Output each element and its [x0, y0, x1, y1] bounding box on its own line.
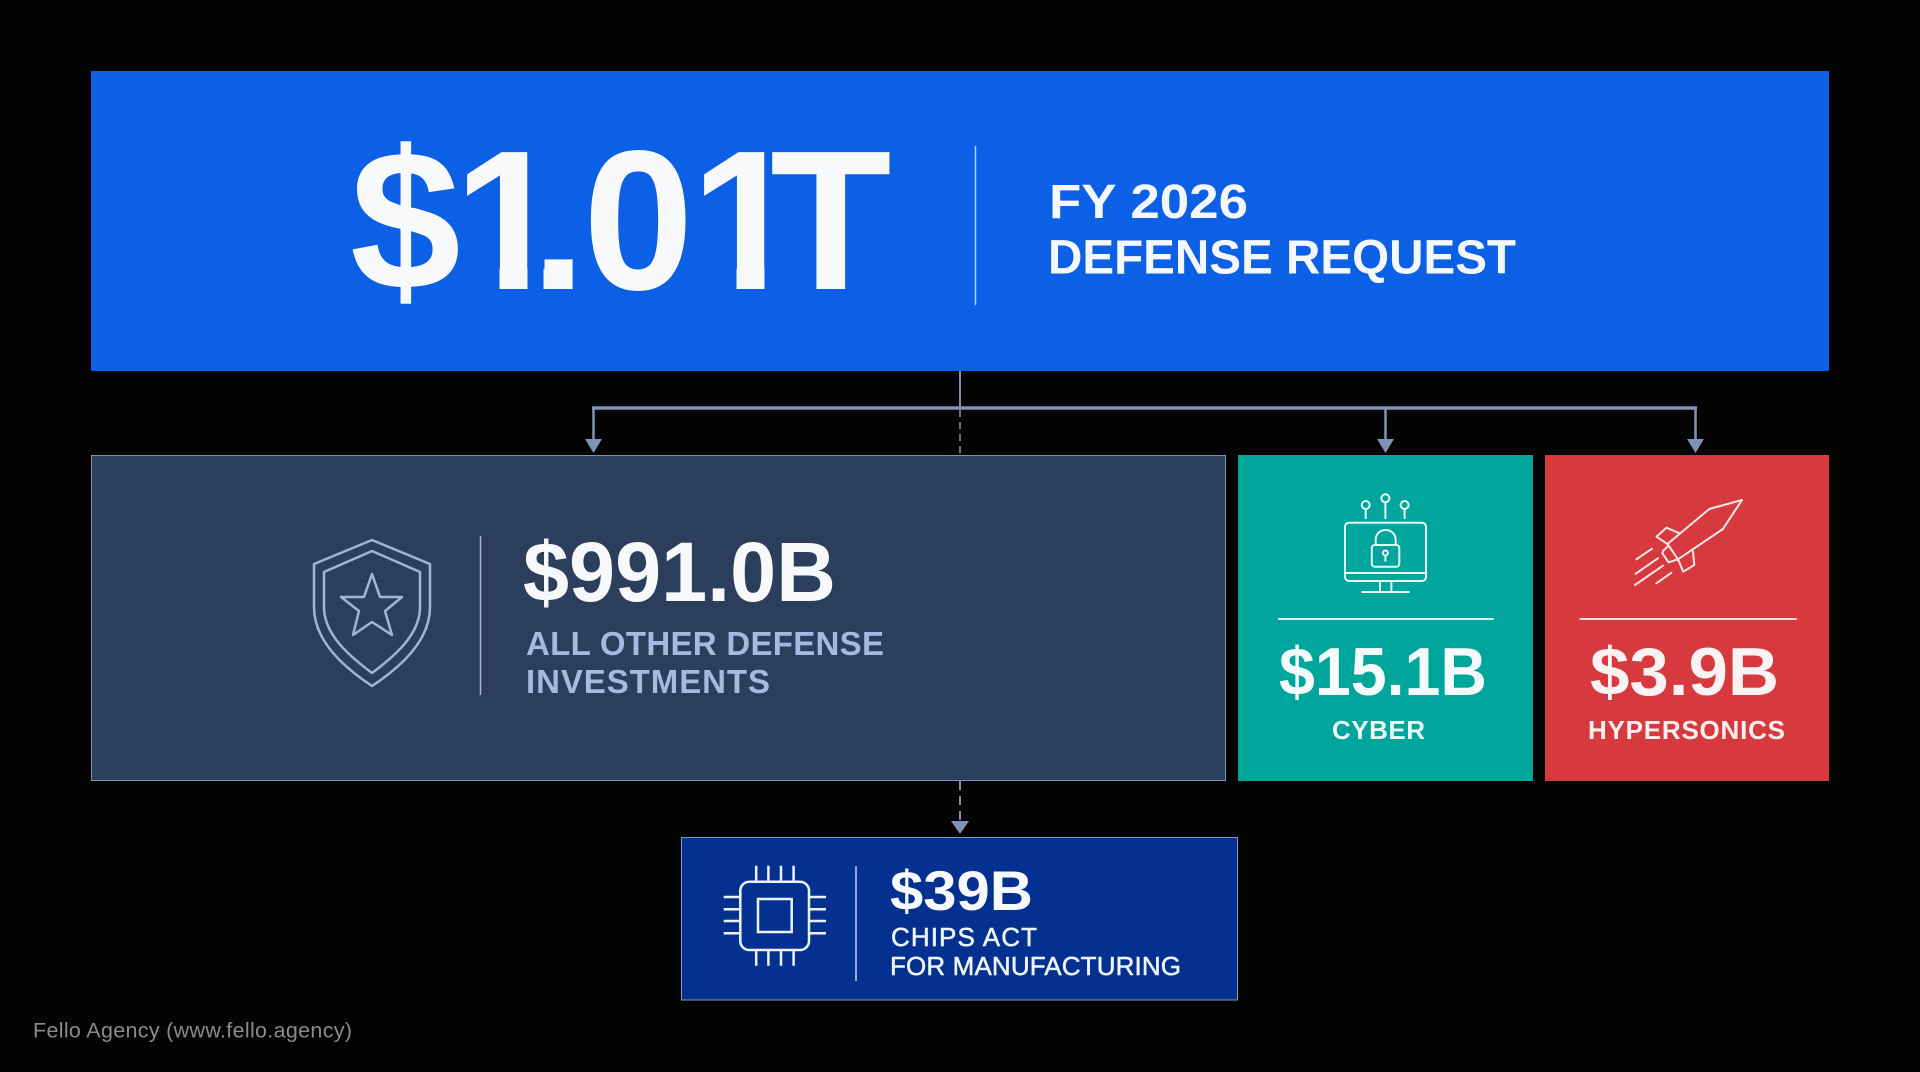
description: [890, 922, 1181, 981]
label: CYBER: [1332, 715, 1425, 745]
description: INVESTMENTS: [526, 663, 770, 700]
icon: microchip: [724, 866, 826, 966]
description: [526, 625, 884, 700]
connector: tree from banner to allocations: [585, 371, 1704, 454]
footer credit: Fello Agency (www.fello.agency): [33, 1018, 352, 1042]
icon: shield with star: [314, 540, 430, 686]
amount: $15.1B: [1279, 634, 1487, 710]
panel: hypersonics: [1545, 455, 1829, 781]
label: HYPERSONICS: [1588, 715, 1785, 745]
panel: chips act: [682, 838, 1238, 1000]
amount: $3.9B: [1590, 634, 1779, 710]
headline amount: $1.01T: [350, 110, 892, 332]
banner label: DEFENSE REQUEST: [1048, 232, 1516, 284]
description: CHIPS ACT: [891, 922, 1037, 952]
icon: monitor with lock: [1345, 494, 1426, 592]
amount: $991.0B: [523, 525, 836, 619]
icon: rocket: [1635, 500, 1742, 585]
arrow: dashed link to chips act: [951, 781, 969, 834]
description: ALL OTHER DEFENSE: [526, 625, 884, 662]
panel: total defense request banner: [91, 71, 1829, 371]
panel: cyber: [1238, 455, 1533, 781]
description: FOR MANUFACTURING: [890, 951, 1181, 981]
banner label: FY 2026: [1049, 176, 1248, 229]
panel: all other defense investments: [92, 456, 1226, 780]
banner label: [1048, 176, 1516, 284]
amount: $39B: [890, 859, 1033, 922]
